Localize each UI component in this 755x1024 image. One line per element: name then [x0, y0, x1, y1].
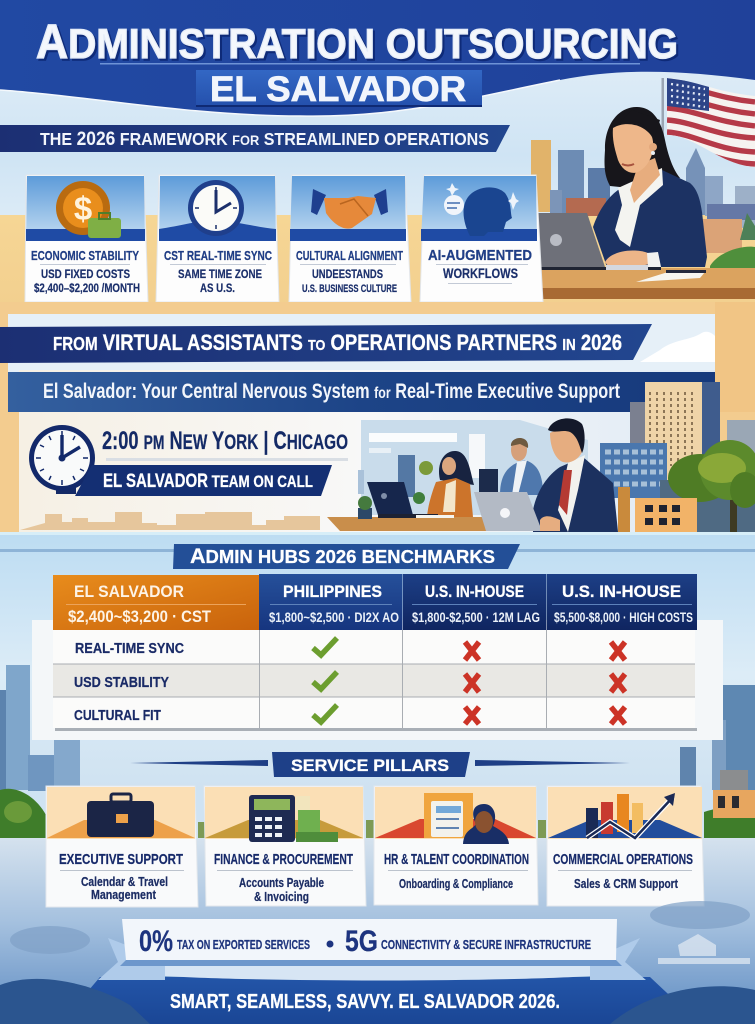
pillar card: HR and talent coordination: HR & TALENT COORDINATION [384, 852, 529, 868]
stat: 5G: 5G [345, 925, 378, 958]
pillar card: executive support: Calendar & Travel [81, 875, 168, 889]
stat: 5G [345, 925, 591, 958]
jacket [593, 170, 707, 267]
blue band: central nervous system: El Salvador: Your Central Nervous System for Real-Time Executive Support [43, 380, 620, 403]
time label: 2:00 PM NEW YORK | CHICAGO [102, 427, 348, 455]
tree [668, 440, 755, 532]
header: U.S. In-House 2: U.S. IN-HOUSE [562, 582, 681, 601]
pillar card: commercial operations: COMMERCIAL OPERATIONS [553, 852, 693, 868]
distant trees [10, 901, 750, 954]
woman at desk [427, 451, 474, 517]
card 4: AI-augmented workflows: AI-AUGMENTED [428, 248, 532, 264]
card 4: AI-augmented workflows: WORKFLOWS [443, 265, 518, 281]
lower background [0, 838, 755, 1024]
header: El Salvador [53, 575, 259, 630]
laptop [538, 213, 661, 270]
icon: handshake [311, 189, 388, 229]
pillar card: finance and procurement [204, 786, 366, 906]
pillar card: commercial operations: Sales & CRM Support [574, 877, 679, 891]
pillar card: HR and talent coordination: Onboarding & Compliance [399, 877, 513, 891]
pillar card: HR and talent coordination [374, 786, 538, 905]
heading: benchmarks [0, 544, 755, 569]
header: U.S. In-House 1: U.S. IN-HOUSE [425, 582, 524, 601]
neck and face [613, 110, 660, 203]
header: Philippines [259, 574, 402, 630]
card 3: cultural alignment: CULTURAL ALIGNMENT [296, 248, 403, 263]
card 3: cultural alignment: UNDEESTANDS [312, 267, 383, 281]
card 1: economic stability [25, 175, 148, 302]
tan skyline [20, 512, 320, 530]
heading: benchmarks: ADMIN HUBS 2026 BENCHMARKS [190, 545, 495, 568]
hair [605, 107, 680, 190]
city left [0, 665, 80, 791]
card 1: economic stability: USD FIXED COSTS [41, 267, 130, 281]
stat: zero tax: 0% [139, 925, 173, 958]
blue band: central nervous system [8, 372, 715, 412]
pillar card: executive support: Management [91, 888, 157, 902]
card 1: economic stability: ECONOMIC STABILITY [31, 248, 139, 263]
small building right [713, 770, 755, 818]
heading: service pillars: SERVICE PILLARS [291, 757, 449, 775]
pillar card: finance and procurement: & Invoicing [254, 890, 309, 904]
office window panel [358, 420, 588, 515]
header: U.S. In-House 2: $5,500-$8,000 · HIGH COSTS [554, 609, 693, 625]
stat: 5G: CONNECTIVITY & SECURE INFRASTRUCTURE [381, 938, 591, 952]
title: ADMINISTRATION OUTSOURCING [38, 18, 680, 71]
desk [540, 268, 755, 299]
header: U.S. In-House 1: $1,800-$2,500 · 12M LAG [412, 609, 540, 625]
header: U.S. In-House 1 [403, 574, 546, 630]
heading ribbon: virtual assistants: FROM VIRTUAL ASSISTANTS TO OPERATIONS PARTNERS IN 2026 [53, 330, 622, 355]
pillar card: finance and procurement: FINANCE & PROCUREMENT [214, 851, 353, 868]
row label: cultural fit: CULTURAL FIT [74, 708, 161, 724]
distant house [658, 934, 750, 964]
pillar card: executive support: EXECUTIVE SUPPORT [59, 851, 183, 868]
city right [680, 685, 755, 792]
footer band [0, 977, 755, 1024]
illustration: woman at laptop [538, 107, 755, 299]
background: sky [0, 0, 755, 310]
icon: AI head [444, 183, 519, 236]
small orange building [635, 498, 697, 532]
card 1: economic stability: $2,400–$2,200 /MONTH [34, 281, 140, 295]
header wave banner [0, 0, 755, 116]
shirt [615, 168, 663, 247]
header: El Salvador: $2,400~$3,200 · CST [68, 608, 211, 626]
card 3: cultural alignment [289, 175, 411, 302]
stat: zero tax [139, 925, 310, 958]
bushes [0, 789, 755, 838]
comparison table [53, 574, 697, 731]
card 2: CST real-time sync: SAME TIME ZONE [178, 267, 262, 281]
stat: zero tax: TAX ON EXPORTED SERVICES [177, 938, 310, 952]
pillar card: executive support [46, 786, 198, 907]
pillar card: finance and procurement: Accounts Payable [239, 876, 324, 890]
card 2: CST real-time sync [156, 175, 279, 302]
icon: clipboard and person [424, 793, 509, 844]
header: El Salvador: EL SALVADOR [74, 582, 184, 601]
ribbon banner [98, 919, 646, 980]
header: Philippines: PHILIPPINES [283, 582, 382, 601]
hands [605, 250, 661, 270]
row backgrounds [53, 630, 697, 731]
cross marks [465, 642, 625, 724]
man in back [479, 438, 543, 495]
subtitle: El Salvador: EL SALVADOR [210, 70, 466, 109]
row label: USD stability: USD STABILITY [74, 675, 169, 691]
icon: calculator and cash [249, 795, 338, 842]
footer band: SMART, SEAMLESS, SAVVY. EL SALVADOR 2026. [170, 991, 560, 1013]
on call ribbon: EL SALVADOR TEAM ON CALL [103, 471, 313, 492]
clock large [29, 425, 95, 494]
icon: clock [188, 180, 244, 236]
header: Philippines: $1,800~$2,500 · DI2X AO [269, 609, 399, 625]
card 2: CST real-time sync: CST REAL-TIME SYNC [164, 248, 272, 263]
city skyline top [531, 140, 755, 268]
header: U.S. In-House 2 [546, 574, 697, 630]
icon: dollar coin: $ [74, 190, 92, 227]
background: sand band [0, 215, 755, 315]
panel behind table [32, 620, 723, 740]
row label: real-time sync: REAL-TIME SYNC [75, 641, 184, 657]
check marks [313, 638, 337, 722]
card 3: cultural alignment: U.S. BUSINESS CULTURE [302, 283, 397, 295]
heading ribbon: virtual assistants [0, 324, 652, 363]
title: ADMINISTRATION OUTSOURCING [36, 16, 678, 69]
card 2: CST real-time sync: AS U.S. [200, 281, 235, 295]
framework ribbon: THE 2026 FRAMEWORK FOR STREAMLINED OPERATIONS [40, 129, 489, 150]
section 3 background [0, 532, 755, 790]
card 4: AI-augmented workflows [420, 175, 543, 302]
icon: briefcase [87, 794, 154, 837]
desk and dark laptop [327, 482, 490, 531]
man in front [474, 418, 630, 532]
heading: service pillars [130, 752, 630, 777]
city backdrop right [600, 382, 755, 532]
icon: bars and arrow [586, 793, 675, 838]
flag [662, 76, 755, 170]
pillar card: commercial operations [547, 786, 704, 906]
on call ribbon [75, 458, 348, 496]
section 2 background [0, 302, 755, 532]
